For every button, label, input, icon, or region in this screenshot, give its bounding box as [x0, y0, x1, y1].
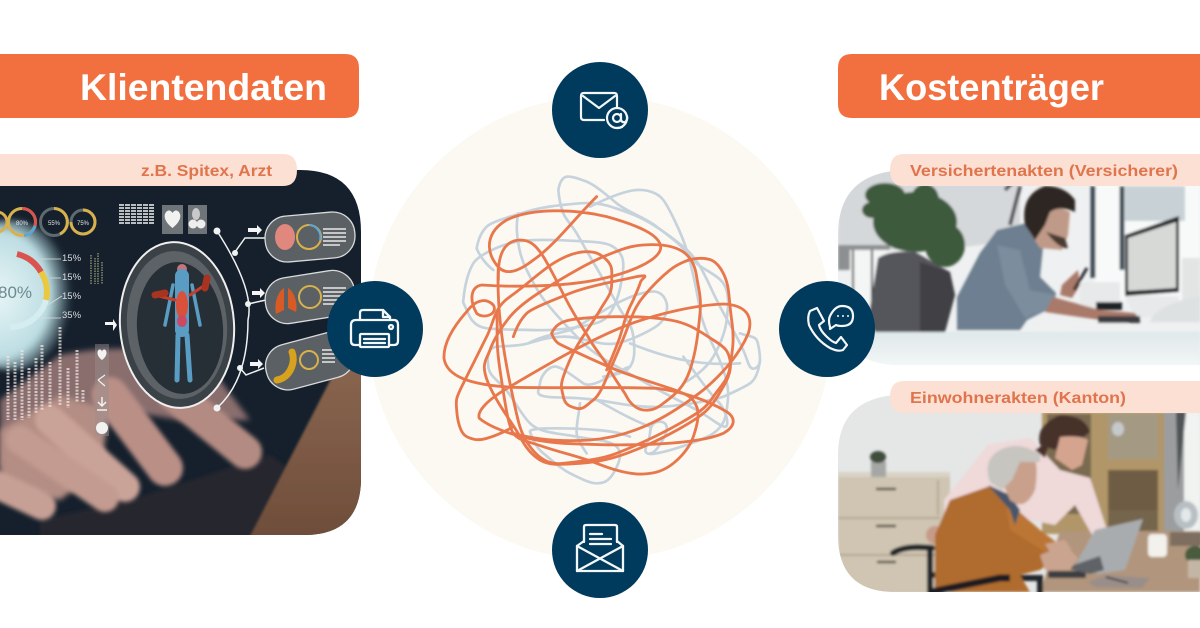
connector lines	[217, 231, 266, 408]
photo: man working at computer in office	[838, 165, 1200, 372]
heading bar: Klientendaten: Klientendaten	[80, 67, 327, 108]
gray scribble	[463, 177, 760, 483]
photo: hands on laptop with medical dashboard: 75%	[77, 221, 90, 227]
icon: email	[552, 62, 648, 158]
man: sweater	[935, 486, 1060, 592]
label: z.B. Spitex, Arzt	[0, 154, 297, 186]
photo: hands on laptop with medical dashboard: 35%	[62, 310, 82, 321]
organ panel: brain	[263, 210, 357, 264]
man: shirt	[957, 223, 1056, 330]
photo: hands on laptop with medical dashboard: 15%	[62, 291, 82, 302]
back of hand	[0, 349, 250, 470]
equalizer bars	[8, 327, 83, 420]
table	[1040, 531, 1200, 592]
office chair with jacket	[868, 252, 955, 332]
desk items	[1080, 282, 1120, 310]
man: head	[1028, 204, 1070, 250]
orange scribble	[444, 197, 750, 474]
label: Einwohnerakten (Kanton): Einwohnerakten (Kanton)	[910, 390, 1126, 407]
status rings	[0, 208, 95, 236]
plant on table	[1185, 546, 1200, 564]
photo: hands on laptop with medical dashboard	[0, 165, 365, 540]
laptop lid	[249, 370, 361, 535]
heading bar: Kostenträger	[838, 54, 1200, 118]
keyboard	[40, 455, 290, 540]
notebook and phone	[1088, 575, 1150, 588]
human body figure	[155, 264, 207, 380]
man: hands	[1040, 545, 1078, 570]
organ panel: lungs	[264, 270, 354, 324]
label: Einwohnerakten (Kanton)	[890, 381, 1200, 413]
sideboard	[838, 473, 950, 593]
icon: phone with speech bubble	[779, 281, 875, 377]
glowing cloud	[0, 220, 72, 370]
photo: hands on laptop with medical dashboard: 15%	[62, 253, 82, 264]
panel: Kostenträger	[838, 54, 1200, 595]
man: collar and head	[988, 485, 1020, 525]
panel: Klientendaten	[0, 54, 365, 540]
photo: hands on laptop with medical dashboard: 15%	[62, 272, 82, 283]
scribble: tangled communication lines	[444, 177, 760, 483]
icon: open envelope with letter	[552, 502, 648, 598]
telephone	[1151, 301, 1200, 322]
background circle	[368, 96, 832, 560]
body scan circle	[114, 238, 240, 412]
ceiling and left wall	[838, 170, 1020, 250]
lamp	[1174, 501, 1198, 529]
woman	[944, 438, 1107, 540]
wooden cabinet	[1042, 412, 1164, 534]
photo: hands on laptop with medical dashboard: 55%	[48, 221, 61, 227]
organ panel: stomach	[264, 332, 350, 391]
curtain and window	[1164, 412, 1186, 537]
desk	[873, 330, 1200, 344]
mug	[1148, 534, 1167, 557]
wheelchair	[893, 547, 1040, 592]
text block and health tiles	[119, 205, 207, 234]
plant	[862, 183, 965, 267]
icon: printer	[327, 281, 423, 377]
man: arm	[1045, 297, 1140, 320]
label: Versichertenakten (Versicherer): Versichertenakten (Versicherer)	[910, 163, 1178, 180]
heading bar: Klientendaten	[0, 54, 359, 118]
vertical icon strip	[95, 344, 109, 436]
photo: hands on laptop with medical dashboard: 80%	[16, 221, 29, 227]
heading bar: Kostenträger: Kostenträger	[879, 67, 1104, 108]
laptop	[1075, 519, 1143, 574]
fingers	[0, 395, 245, 506]
monitor	[1125, 216, 1179, 296]
label: z.B. Spitex, Arzt: z.B. Spitex, Arzt	[141, 163, 273, 180]
small signal bars	[91, 253, 102, 284]
plant pot	[871, 461, 886, 477]
donut gauge	[10, 254, 47, 327]
windows	[1094, 170, 1200, 300]
label: Versichertenakten (Versicherer)	[890, 154, 1200, 186]
photo: caregiver and elderly man at laptop	[838, 395, 1200, 595]
